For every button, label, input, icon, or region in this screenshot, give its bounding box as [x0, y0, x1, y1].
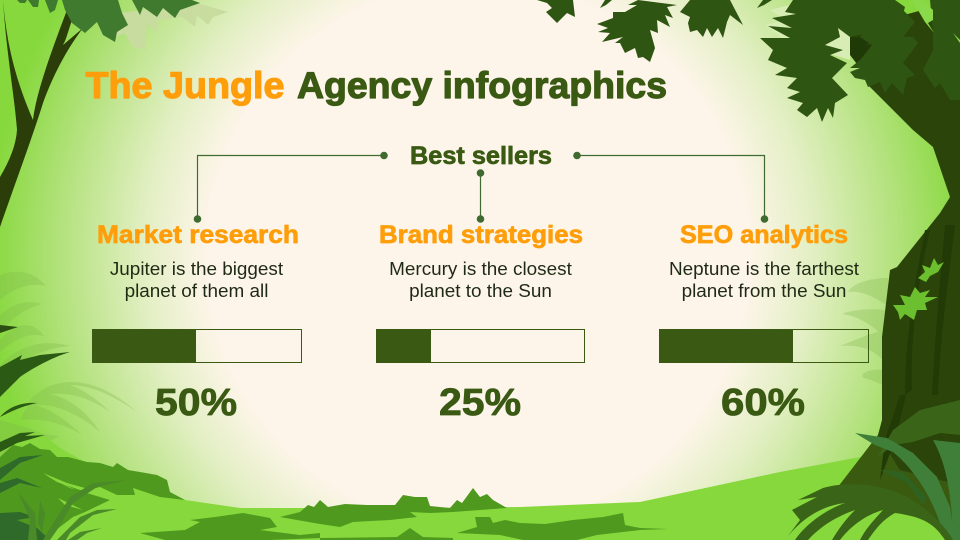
right tree trunk [838, 0, 960, 540]
column: seo analytics [659, 221, 868, 424]
description: Mercury is the closest [389, 259, 573, 280]
progress bar 25% [376, 329, 584, 363]
value: 60% [721, 382, 805, 424]
progress bar 60% [659, 329, 868, 363]
right canopy second blob [850, 7, 918, 95]
middle grass tufts [140, 488, 668, 540]
left tree trunk [0, 0, 83, 227]
connector dots [194, 152, 768, 223]
foliage top left [17, 0, 200, 42]
description: planet to the Sun [409, 281, 552, 302]
faded background fronds right [840, 278, 888, 386]
left grass mound [0, 443, 185, 540]
connector lines [198, 156, 764, 219]
column heading: Market research [97, 221, 299, 249]
description: planet of them all [125, 281, 268, 302]
progress bar 50% [92, 329, 302, 363]
bright gap in canopy [912, 0, 934, 33]
value: 25% [439, 382, 521, 424]
trunk streaks [880, 225, 955, 480]
trunk base lighter [838, 435, 960, 540]
right tree canopy [760, 0, 905, 122]
ground [0, 433, 960, 540]
mound highlights [43, 473, 110, 510]
leaves on trunk [893, 258, 944, 320]
canopy shadow [850, 37, 885, 68]
column heading: Brand strategies [379, 221, 583, 249]
column heading: SEO analytics [680, 221, 848, 249]
title: Agency infographics [297, 65, 667, 106]
left dark fronds [0, 325, 127, 540]
column: brand strategies [376, 221, 584, 424]
description: planet from the Sun [682, 281, 846, 302]
pale leaf behind canopy [765, 5, 850, 60]
column: market research [92, 221, 302, 424]
title: The Jungle [86, 65, 284, 106]
pale foliage top left [115, 3, 228, 50]
bright leaf tip [953, 33, 960, 43]
faded background fronds left [0, 272, 137, 456]
value: 50% [155, 382, 237, 424]
canopy top right blob [923, 0, 960, 100]
title [86, 65, 667, 106]
right bottom fronds [785, 400, 960, 540]
heading: best sellers: Best sellers [410, 142, 552, 170]
description: Jupiter is the biggest [110, 259, 284, 280]
description: Neptune is the farthest [669, 259, 860, 280]
upper-middle leaves [537, 0, 772, 62]
